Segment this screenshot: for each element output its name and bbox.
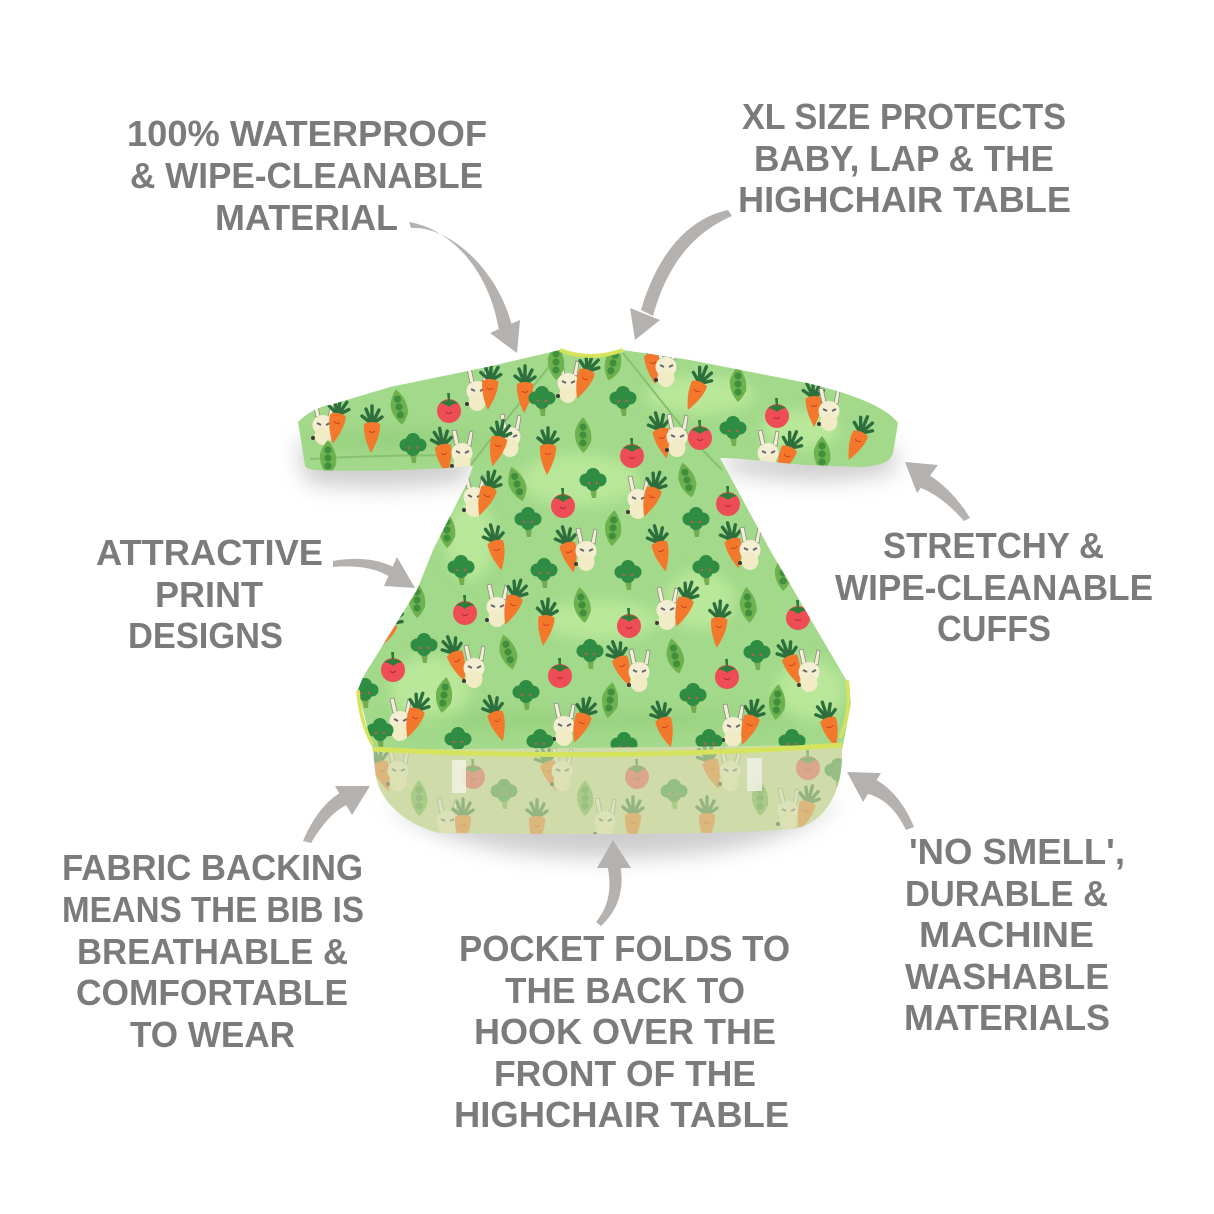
callout: print designs: ATTRACTIVE [96,532,323,573]
callout: print designs [96,532,323,656]
callout: XL size: BABY, LAP & THE [754,138,1054,179]
sleeve fold [310,455,472,459]
callout: stretchy cuffs: WIPE-CLEANABLE [835,567,1153,608]
callout: print designs: DESIGNS [128,615,283,656]
arrow: cuffs to sleeve [905,462,970,521]
callout: fabric backing: BREATHABLE & [77,931,348,972]
side binding [358,680,848,745]
callout: pocket folds: POCKET FOLDS TO [459,928,790,969]
bib shadow [298,440,895,858]
bib body and sleeves [290,336,910,762]
callout: no smell materials: WASHABLE [905,956,1109,997]
callout: waterproof material [127,113,487,238]
callout: fabric backing: TO WEAR [130,1014,295,1055]
translucent pocket [373,746,842,834]
callout: waterproof material: & WIPE-CLEANABLE [130,155,483,196]
callout: XL size: HIGHCHAIR TABLE [738,179,1071,220]
callout: no smell materials: DURABLE & [905,873,1108,914]
callout: fabric backing: FABRIC BACKING [62,847,363,888]
raglan seams [470,353,722,470]
pocket binding [373,745,842,755]
collar binding [560,350,623,356]
callout: fabric backing [62,847,364,1055]
arrow: waterproof to bib [409,222,520,353]
arrow: XL size to bib [630,210,732,340]
callout: stretchy cuffs: STRETCHY & [883,525,1104,566]
callout: print designs: PRINT [155,574,263,615]
callout: fabric backing: MEANS THE BIB IS [62,889,364,930]
callout: waterproof material: MATERIAL [215,197,398,238]
callout: no smell materials: MACHINE [919,914,1094,955]
arrow: pocket folds to pocket [596,840,631,926]
callout: pocket folds: HOOK OVER THE [474,1011,776,1052]
callout: no smell materials: MATERIALS [904,997,1110,1038]
arrow: print designs to bib [333,557,415,588]
callout: pocket folds: HIGHCHAIR TABLE [454,1094,789,1135]
arrow: no smell to pocket [847,772,914,830]
callout: no smell materials [904,831,1125,1038]
callout: XL size [738,96,1071,220]
callout: waterproof material: 100% WATERPROOF [127,113,487,154]
callout: fabric backing: COMFORTABLE [76,972,348,1013]
callout: pocket folds: FRONT OF THE [494,1053,756,1094]
arrow: fabric backing to bib [303,786,370,843]
callout: pocket folds: THE BACK TO [505,970,745,1011]
callout: pocket folds [454,928,790,1135]
callout: no smell materials: 'NO SMELL', [909,831,1125,872]
long-sleeve bib illustration [290,336,910,847]
callout: stretchy cuffs [835,525,1153,649]
print pattern [311,336,877,762]
callout: stretchy cuffs: CUFFS [937,608,1051,649]
callout: XL size: XL SIZE PROTECTS [742,96,1066,137]
